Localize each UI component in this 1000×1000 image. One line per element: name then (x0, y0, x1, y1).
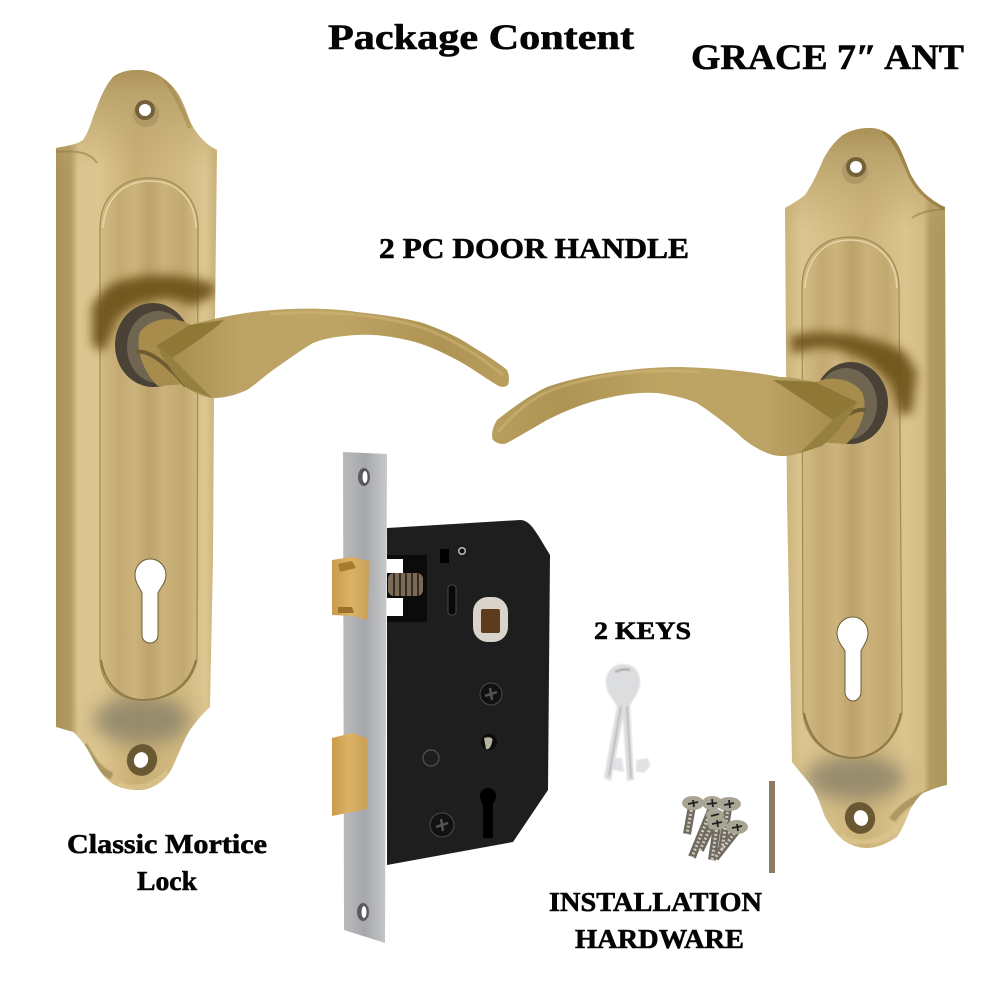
label: installation hardware: HARDWARE (575, 924, 744, 954)
keys (604, 664, 650, 781)
lock key slot (480, 788, 496, 838)
label: mortice lock (67, 829, 267, 896)
right top screw hole (842, 157, 868, 184)
spindle rod (769, 781, 775, 873)
right keyhole (837, 617, 868, 701)
spindle hub (473, 597, 508, 642)
title: package content: Package Content (328, 17, 634, 57)
left lever (156, 309, 509, 398)
right backplate (780, 120, 955, 848)
right recessed panel (802, 237, 902, 758)
label: mortice lock: Lock (137, 866, 197, 896)
screws (682, 796, 748, 860)
lock face plate (343, 452, 387, 943)
lock screws and slots (423, 547, 502, 837)
dead bolt (332, 733, 367, 816)
right dark patina band (790, 333, 917, 416)
lock body (387, 520, 550, 865)
right rosette (812, 362, 888, 444)
left dark patina band (92, 275, 214, 352)
right lever (492, 367, 857, 456)
left rosette (115, 303, 192, 387)
label: installation hardware (549, 887, 763, 954)
right bottom screw hole (840, 798, 880, 838)
left keyhole (135, 559, 166, 643)
mortice lock (332, 452, 550, 943)
label: door handle: 2 PC DOOR HANDLE (379, 234, 689, 265)
label: mortice lock: Classic Mortice (67, 829, 267, 859)
label: installation hardware: INSTALLATION (549, 887, 763, 917)
product name: GRACE 7″ ANT (691, 37, 964, 77)
left door handle (50, 60, 509, 790)
left top screw hole (133, 100, 159, 127)
latch cutout (387, 555, 427, 622)
latch bolt (332, 557, 369, 620)
left bottom screw hole (122, 740, 162, 780)
right door handle (492, 120, 955, 848)
left backplate (50, 60, 225, 790)
label: keys: 2 KEYS (594, 618, 691, 645)
left recessed panel (100, 178, 198, 700)
